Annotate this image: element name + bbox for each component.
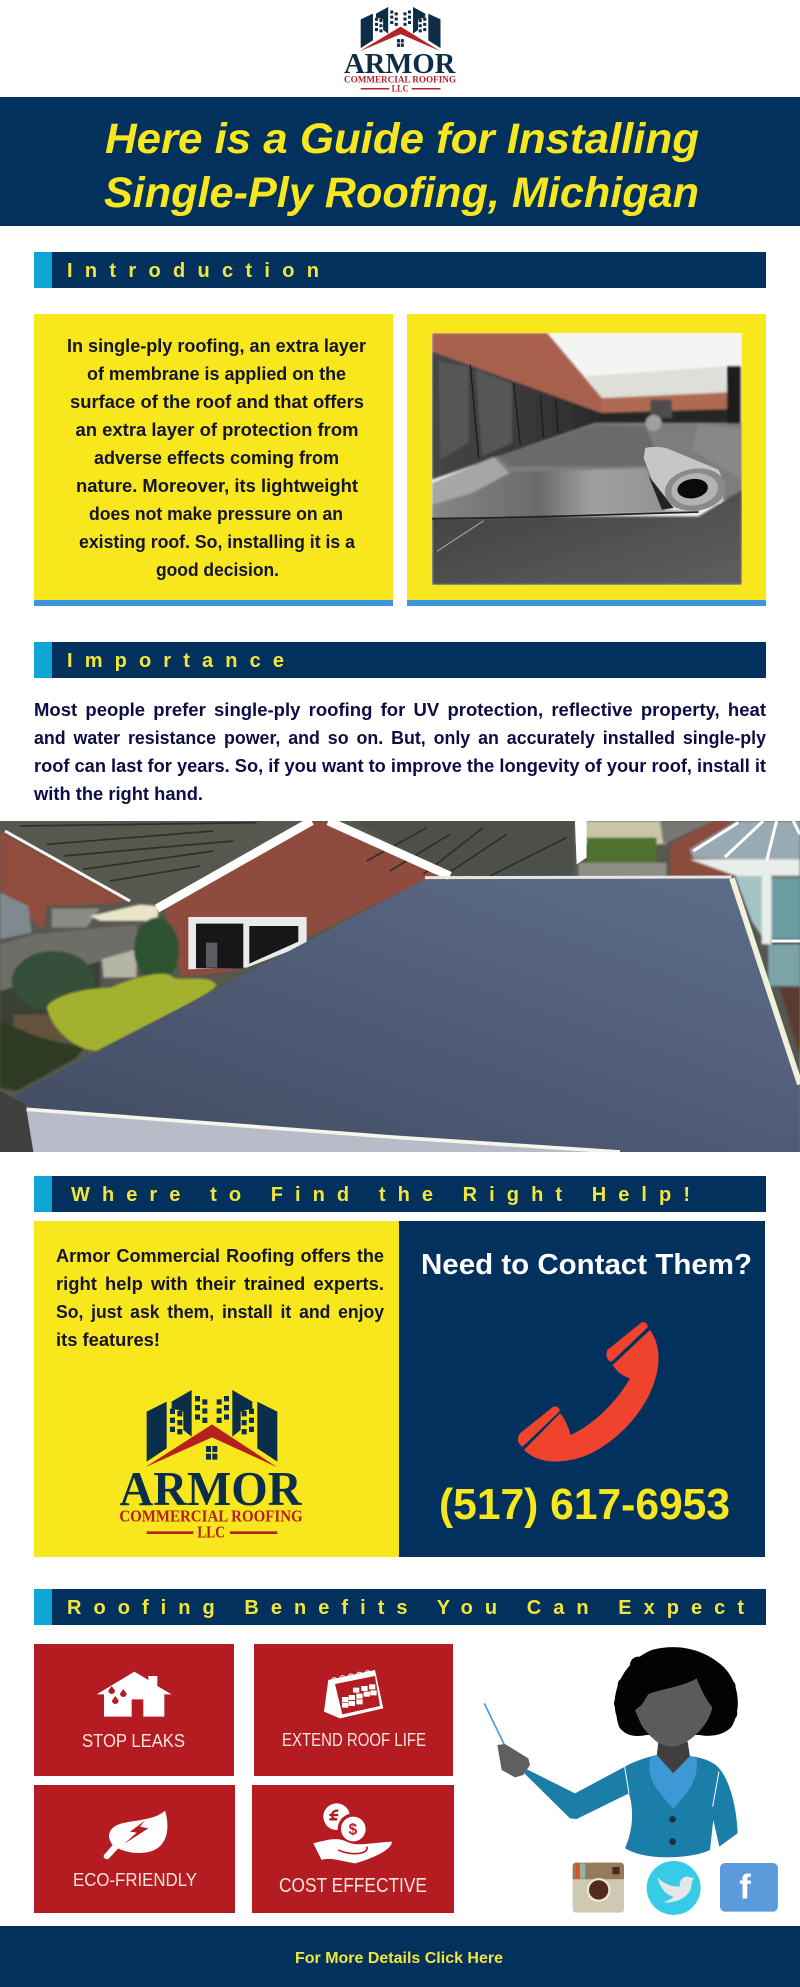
card: eco-friendly: ECO-FRIENDLY <box>73 1870 197 1890</box>
text block: description: right help with their trained experts. <box>56 1274 384 1294</box>
section heading: Where to Find the Right Help <box>34 1176 766 1212</box>
text block: importance paragraph: and water resistance power, and so on. But, only an accurately installed single-ply <box>34 728 766 748</box>
card: cost effective <box>252 1785 454 1913</box>
photo: flat single-ply roof <box>0 821 800 1152</box>
icon: coins in hand: $ <box>349 1822 358 1839</box>
panel: introduction text: adverse effects coming from <box>94 447 339 468</box>
hair <box>614 1647 738 1736</box>
panel: Armor description and logo <box>34 1221 399 1557</box>
panel: introduction text: surface of the roof and that offers <box>70 391 364 412</box>
logo: Armor Commercial Roofing header: LLC <box>392 84 409 94</box>
section heading: Importance <box>34 642 766 678</box>
body and arm <box>525 1755 738 1857</box>
neck <box>657 1742 690 1773</box>
buttons <box>669 1816 676 1845</box>
section heading: Roofing Benefits: Roofing Benefits You Can Expect <box>67 1597 744 1619</box>
text block: importance paragraph: with the right hand. <box>33 784 203 804</box>
icon: facebook <box>720 1863 778 1912</box>
panel: introduction text: existing roof. So, installing it is a <box>79 531 356 552</box>
panel: introduction text <box>34 314 393 606</box>
text block: description: Armor Commercial Roofing offers the <box>56 1246 384 1266</box>
text block: importance paragraph <box>33 700 766 804</box>
card: cost effective: COST EFFECTIVE <box>279 1875 427 1897</box>
section heading: Introduction <box>34 252 766 288</box>
panel: introduction text: of membrane is applied on the <box>87 363 346 384</box>
logo: Armor Commercial Roofing <box>119 1390 303 1541</box>
title banner: Here is a Guide for Installing <box>105 115 699 163</box>
panel: membrane roll photo <box>407 314 766 606</box>
footer band: For More Details Click Here <box>295 1950 503 1967</box>
face <box>635 1678 712 1747</box>
logo: Armor Commercial Roofing header: COMMERCIAL ROOFING <box>344 75 456 85</box>
card: extend roof life <box>254 1644 453 1776</box>
text block: importance paragraph: roof can last for years. So, if you want to improve the longevity of your roof, install it <box>34 756 766 776</box>
text block: description <box>56 1246 384 1350</box>
section heading: Importance: Importance <box>67 650 284 672</box>
panel: introduction text: In single-ply roofing, an extra layer <box>67 335 366 356</box>
phone number: (517) 617-6953 <box>439 1480 730 1529</box>
card: stop leaks: STOP LEAKS <box>82 1731 185 1751</box>
footer band <box>0 1926 800 1987</box>
hand <box>497 1744 530 1777</box>
text block: description: its features! <box>56 1330 160 1350</box>
panel: introduction text: good decision. <box>156 559 279 580</box>
panel: introduction text: nature. Moreover, its lightweight <box>76 475 358 496</box>
panel: introduction text: does not make pressure on an <box>89 503 343 524</box>
panel: introduction text: an extra layer of protection from <box>76 419 358 440</box>
section heading: Roofing Benefits <box>34 1589 766 1625</box>
icon: twitter <box>647 1861 701 1915</box>
icon: instagram <box>573 1863 624 1913</box>
pointer <box>484 1703 504 1744</box>
collar <box>649 1755 697 1809</box>
title banner <box>0 97 800 226</box>
icon: facebook: f <box>739 1869 751 1907</box>
icon: telephone handset <box>518 1322 659 1462</box>
logo: Armor Commercial Roofing: ARMOR <box>119 1461 302 1516</box>
panel: contact <box>399 1221 765 1557</box>
text block: importance paragraph: Most people prefer single-ply roofing for UV protection, reflective property, heat <box>34 700 766 720</box>
section heading: Introduction: Introduction <box>67 260 319 282</box>
card: eco-friendly <box>34 1785 235 1913</box>
logo: Armor Commercial Roofing: LLC <box>197 1522 225 1541</box>
logo: Armor Commercial Roofing header <box>344 7 456 94</box>
card: stop leaks <box>34 1644 234 1776</box>
card: extend roof life: EXTEND ROOF LIFE <box>282 1730 426 1750</box>
icon: coins in hand <box>313 1803 392 1863</box>
section heading: Where to Find the Right Help: Where to Find the Right Help! <box>71 1184 690 1206</box>
title banner: Single-Ply Roofing, Michigan <box>104 169 699 217</box>
text block: description: So, just ask them, install it and enjoy <box>56 1302 384 1322</box>
heading: need to contact: Need to Contact Them? <box>421 1249 752 1281</box>
illustration: presenter woman <box>484 1647 738 1857</box>
logo: Armor Commercial Roofing header: ARMOR <box>344 49 456 80</box>
icon: leaf with bolt <box>104 1811 167 1859</box>
icon: calendar <box>324 1670 383 1718</box>
logo: Armor Commercial Roofing: COMMERCIAL ROOFING <box>119 1507 303 1526</box>
icon: leaking house <box>97 1672 172 1717</box>
